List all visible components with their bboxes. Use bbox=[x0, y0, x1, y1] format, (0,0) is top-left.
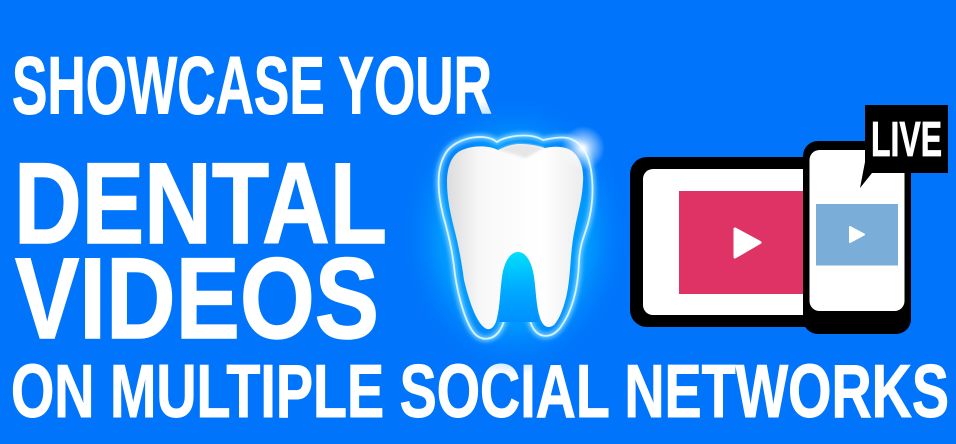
phone play icon bbox=[850, 227, 864, 242]
live speech bubble bbox=[860, 105, 948, 188]
tablet bbox=[630, 157, 830, 327]
tablet frame bbox=[630, 157, 830, 327]
phone screen bbox=[810, 150, 904, 311]
phone bbox=[803, 141, 911, 334]
tooth glow ring bbox=[439, 136, 592, 339]
phone frame bbox=[803, 141, 911, 334]
tablet video panel bbox=[679, 191, 814, 294]
tablet screen bbox=[643, 169, 823, 315]
icon: glowing tooth bbox=[400, 95, 630, 375]
phone video panel bbox=[816, 204, 898, 266]
heading: showcase your: SHOWCASE YOUR bbox=[12, 40, 492, 132]
icon: video devices bbox=[630, 105, 948, 334]
tooth halo bbox=[400, 95, 630, 375]
heading: dental: DENTAL bbox=[14, 140, 387, 268]
heading: videos: VIDEOS bbox=[15, 235, 379, 363]
sparkle bbox=[561, 126, 605, 170]
crown ridge bbox=[498, 144, 545, 158]
root gap glow bbox=[499, 250, 538, 322]
tablet play icon bbox=[735, 229, 760, 257]
tooth body bbox=[447, 144, 583, 329]
